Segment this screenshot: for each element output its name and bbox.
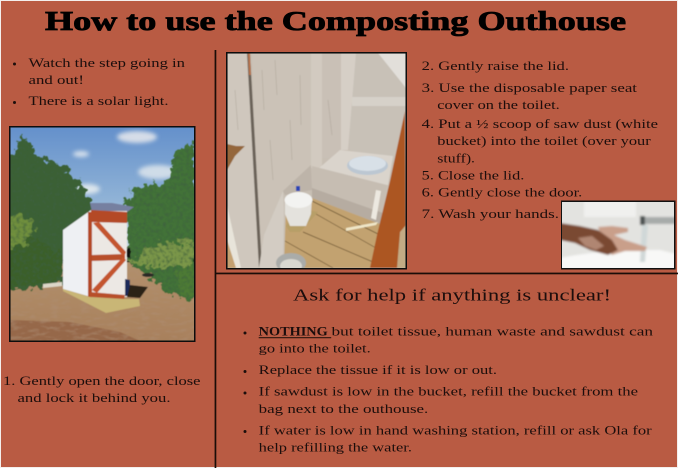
- divider: vertical: [215, 50, 216, 468]
- photo: outhouse interior with toilet: [226, 52, 407, 273]
- text block: steps 2 to 7: bucket) into the toilet (over your: [437, 133, 652, 148]
- text block: step 1: and lock it behind you.: [18, 390, 170, 405]
- text block: safety tips: Watch the step going in: [28, 55, 186, 70]
- panel: help and rules: [244, 286, 654, 455]
- text block: step 1: 1. Gently open the door, close: [3, 373, 201, 388]
- text block: rules list: If sawdust is low in the bucket, refill the bucket from the: [259, 384, 638, 399]
- text block: rules list: help refilling the water.: [259, 440, 412, 455]
- text block: steps 2 to 7: 5. Close the lid.: [422, 168, 524, 182]
- heading: ask for help: Ask for help if anything is unclear!: [293, 286, 611, 305]
- text block: steps 2 to 7: 2. Gently raise the lid.: [422, 58, 569, 73]
- text block: steps 2 to 7: [422, 58, 658, 221]
- text block: safety tips: There is a solar light.: [28, 93, 168, 108]
- text block: rules list: NOTHING: [259, 324, 328, 339]
- text block: steps 2 to 7: 7. Wash your hands.: [422, 206, 559, 221]
- photo: hand washing: [560, 200, 676, 270]
- title: How to use the Composting Outhouse: [45, 6, 626, 36]
- panel: left column: [3, 55, 201, 405]
- text block: steps 2 to 7: stuff).: [437, 150, 475, 166]
- text block: steps 2 to 7: 4. Put a ½ scoop of saw dust (white: [422, 116, 658, 131]
- text block: rules list: bag next to the outhouse.: [259, 401, 428, 416]
- text block: rules list: [244, 324, 654, 455]
- text block: rules list: go into the toilet.: [259, 341, 371, 356]
- text block: rules list: If water is low in hand washing station, refill or ask Ola for: [259, 423, 653, 438]
- text block: steps 2 to 7: 3. Use the disposable paper seat: [422, 80, 638, 95]
- text block: steps 2 to 7: cover on the toilet.: [437, 97, 560, 112]
- text block: safety tips: [13, 55, 186, 108]
- text block: rules list: Replace the tissue if it is low or out.: [259, 362, 497, 377]
- text block: step 1: [3, 373, 201, 405]
- divider: horizontal: [215, 273, 678, 274]
- photo: outhouse exterior: [5, 126, 200, 342]
- text block: rules list: but toilet tissue, human waste and sawdust can: [332, 324, 654, 339]
- panel: toilet steps: [226, 52, 676, 273]
- text block: safety tips: and out!: [28, 72, 84, 87]
- text block: steps 2 to 7: 6. Gently close the door.: [422, 185, 582, 200]
